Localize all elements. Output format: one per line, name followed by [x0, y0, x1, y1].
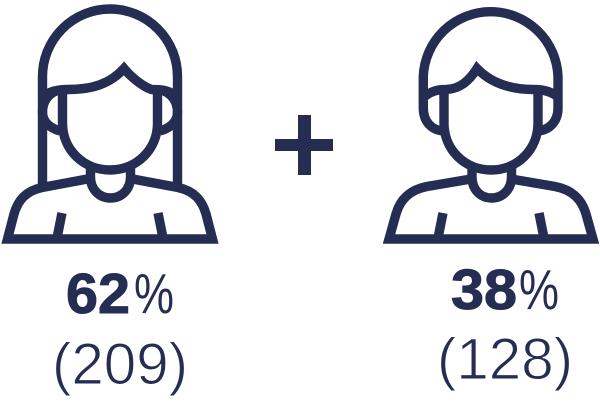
stat: women percentage: % — [134, 262, 174, 326]
plus sign — [275, 115, 333, 175]
icon: man — [389, 12, 593, 239]
stat: women percentage — [66, 262, 174, 326]
stat: women percentage: 62 — [66, 262, 130, 326]
icon: woman — [8, 9, 212, 239]
stat: men percentage: % — [519, 258, 559, 322]
stat: men count: (128) — [437, 327, 573, 392]
stat: men percentage: 38 — [451, 258, 517, 322]
stat: men percentage — [451, 258, 559, 322]
stat: women count: (209) — [52, 332, 188, 397]
